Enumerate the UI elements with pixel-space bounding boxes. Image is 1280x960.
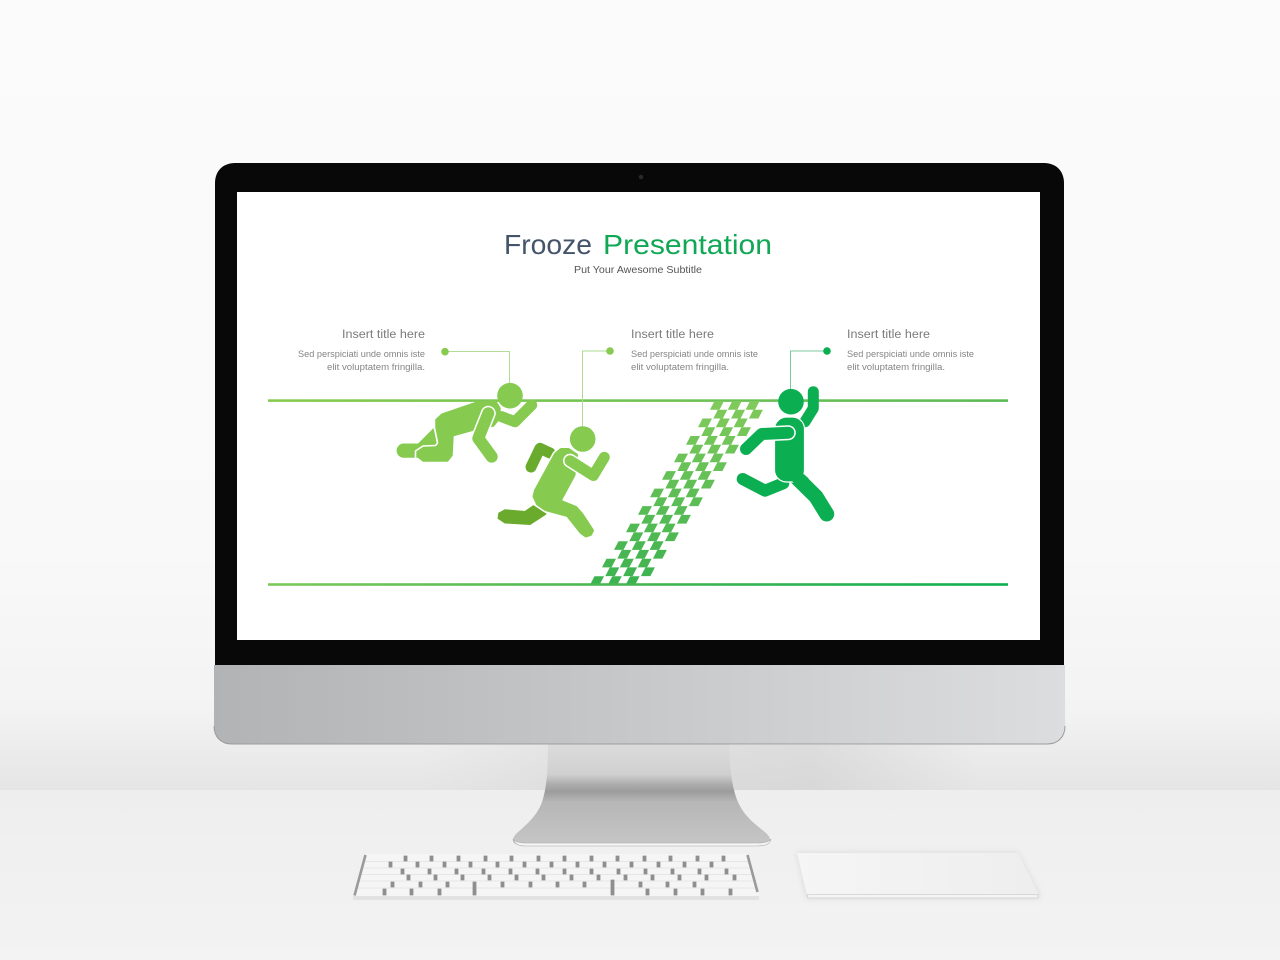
keyboard key gaps bbox=[383, 856, 736, 895]
body outline gap bbox=[416, 428, 438, 458]
far arm bbox=[502, 405, 532, 422]
trackpad surface bbox=[797, 853, 1038, 895]
figure 1: crawling runner bbox=[397, 383, 532, 460]
head bbox=[497, 383, 523, 409]
connector 1 bbox=[441, 348, 510, 386]
front leg bbox=[793, 474, 827, 514]
torso outline gap bbox=[534, 450, 592, 536]
head bbox=[778, 389, 804, 415]
back leg bbox=[397, 429, 438, 457]
subtitle: Put Your Awesome Subtitle bbox=[574, 264, 702, 276]
monitor body bbox=[214, 163, 1065, 744]
connector 2 bbox=[582, 347, 614, 428]
text block 2: elit voluptatem fringilla. bbox=[631, 362, 729, 372]
text block 2: Sed perspiciati unde omnis iste bbox=[631, 349, 758, 359]
torso bbox=[774, 417, 804, 482]
figure 3: leaping runner bbox=[743, 389, 827, 514]
camera bbox=[639, 175, 643, 179]
text block 3 bbox=[847, 329, 974, 372]
checkered finish strip bbox=[590, 401, 763, 585]
text block 3: Sed perspiciati unde omnis iste bbox=[847, 349, 974, 359]
keyboard bbox=[353, 854, 759, 900]
front arm bbox=[478, 413, 492, 457]
raised arm bbox=[805, 392, 813, 422]
text block 1: Insert title here bbox=[342, 329, 425, 341]
top track line bbox=[268, 399, 1008, 402]
monitor chin bbox=[214, 665, 1065, 744]
connector 3 bbox=[790, 347, 831, 392]
bottom track line bbox=[268, 583, 1008, 586]
title: Frooze bbox=[504, 229, 592, 260]
text block 1 bbox=[298, 329, 425, 372]
keyboard lip bbox=[353, 896, 759, 900]
wall shadow behind stand bbox=[420, 745, 980, 790]
text block 1: Sed perspiciati unde omnis iste bbox=[298, 349, 425, 359]
screen bbox=[237, 192, 1040, 640]
torso and front leg bbox=[534, 450, 592, 536]
trackpad shadow bbox=[796, 852, 1040, 899]
keyboard edges bbox=[354, 855, 758, 896]
title bbox=[504, 229, 772, 260]
torso and front shin bbox=[419, 402, 499, 460]
front arm bbox=[570, 457, 604, 476]
chin bottom edge bbox=[214, 726, 1065, 744]
trackpad lip bbox=[807, 894, 1038, 898]
trackpad bbox=[796, 852, 1040, 899]
figure 2: sprinting runner bbox=[498, 426, 604, 536]
text block 3: elit voluptatem fringilla. bbox=[847, 362, 945, 372]
rear arm bbox=[531, 448, 550, 467]
title: Presentation bbox=[603, 229, 772, 260]
text block 1: elit voluptatem fringilla. bbox=[327, 362, 425, 372]
text block 3: Insert title here bbox=[847, 329, 930, 341]
keyboard body bbox=[353, 854, 759, 900]
text block 2: Insert title here bbox=[631, 329, 714, 341]
monitor stand bbox=[513, 744, 771, 846]
background: desk bbox=[0, 790, 1280, 960]
text block 2 bbox=[631, 329, 758, 372]
monitor bezel bbox=[215, 163, 1064, 665]
rear leg bbox=[498, 506, 546, 524]
head bbox=[570, 426, 596, 452]
keyboard row lines bbox=[356, 862, 757, 888]
front arm bbox=[746, 433, 788, 449]
front leg joint bbox=[796, 476, 803, 482]
rear leg bbox=[743, 479, 783, 491]
